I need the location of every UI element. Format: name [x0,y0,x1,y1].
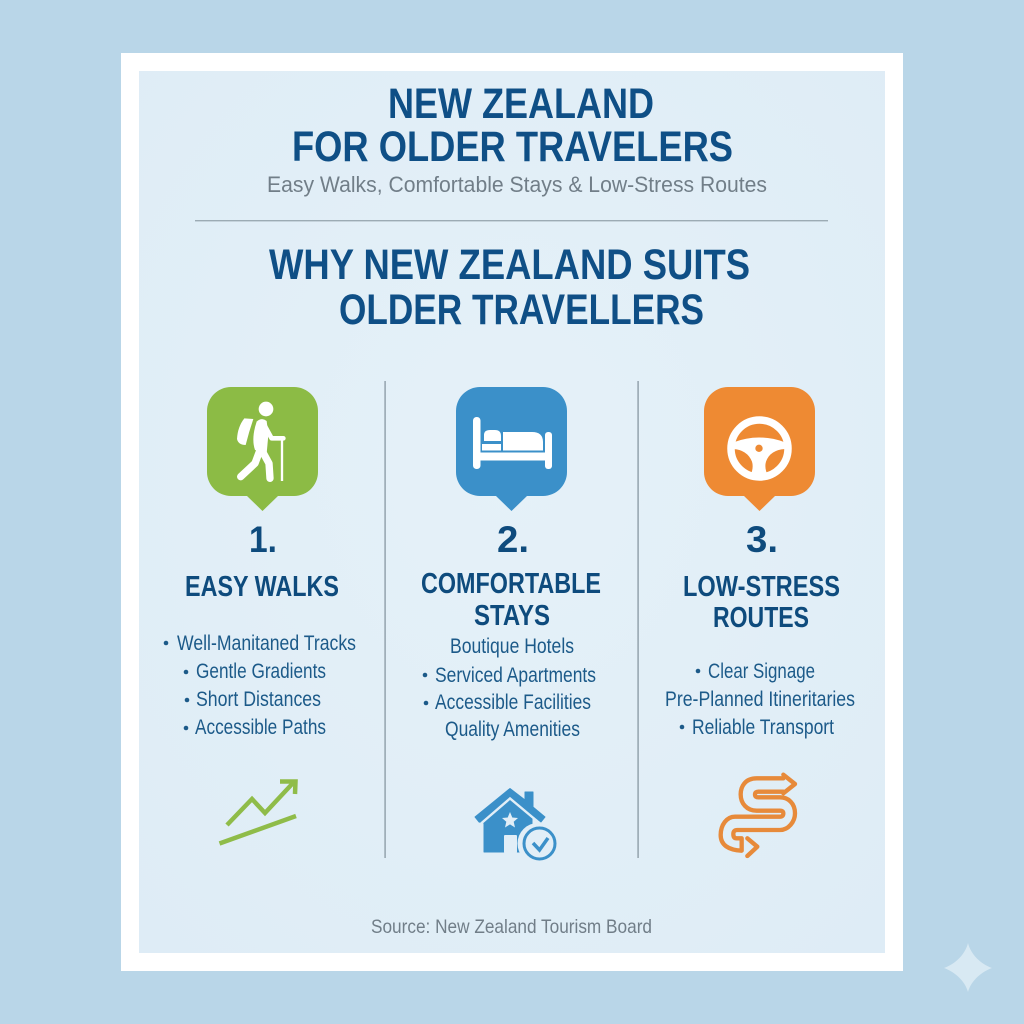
list: comfortable stays: Boutique Hotels [450,635,574,658]
list: low-stress routes: Reliable Transport [692,716,834,739]
list: low-stress routes: Pre-Planned Itineritaries [665,688,855,711]
list: low-stress routes [665,660,855,739]
title: NEW ZEALAND [388,80,654,128]
icon: hiker in green speech bubble [207,387,318,511]
heading: comfortable stays [421,568,601,632]
icon: bed in blue speech bubble [456,387,567,511]
icon: winding road arrow [721,775,795,856]
list: easy walks: Accessible Paths [195,716,326,739]
number 1: 1. [249,519,277,560]
list: easy walks: Gentle Gradients [196,660,326,683]
heading: low-stress routes: ROUTES [713,602,809,634]
icon: steering wheel in orange speech bubble [704,387,815,511]
list: comfortable stays: Quality Amenities [445,718,580,741]
number 2: 2. [497,519,529,560]
section heading: WHY NEW ZEALAND SUITS [269,241,750,289]
heading: easy walks: EASY WALKS [185,571,339,603]
icon: sparkle [944,943,992,992]
list: easy walks: Well-Manitaned Tracks [177,632,356,655]
panel: easy walks [164,387,356,844]
heading: low-stress routes [683,571,840,634]
subtitle: Easy Walks, Comfortable Stays & Low-Stress Routes [267,172,767,197]
heading: low-stress routes: LOW-STRESS [683,571,840,603]
icon: house with star and check [475,788,558,864]
icon: upward trend arrow [220,782,296,844]
list: low-stress routes: Clear Signage [708,660,815,683]
heading: comfortable stays: COMFORTABLE [421,568,601,600]
section heading [269,241,750,334]
list: easy walks [164,632,356,739]
title [292,80,733,171]
list: comfortable stays: Accessible Facilities [435,691,591,714]
source note: Source: New Zealand Tourism Board [371,916,652,938]
heading: comfortable stays: STAYS [474,600,550,632]
list: easy walks: Short Distances [196,688,321,711]
title: FOR OLDER TRAVELERS [292,123,733,171]
list: comfortable stays [423,635,596,741]
white card frame [121,53,903,971]
list: comfortable stays: Serviced Apartments [435,664,596,687]
number 3: 3. [746,519,778,560]
section heading: OLDER TRAVELLERS [339,286,704,334]
panel: low-stress routes [665,387,855,856]
inner light blue panel [139,71,885,953]
panel: comfortable stays [421,387,601,864]
